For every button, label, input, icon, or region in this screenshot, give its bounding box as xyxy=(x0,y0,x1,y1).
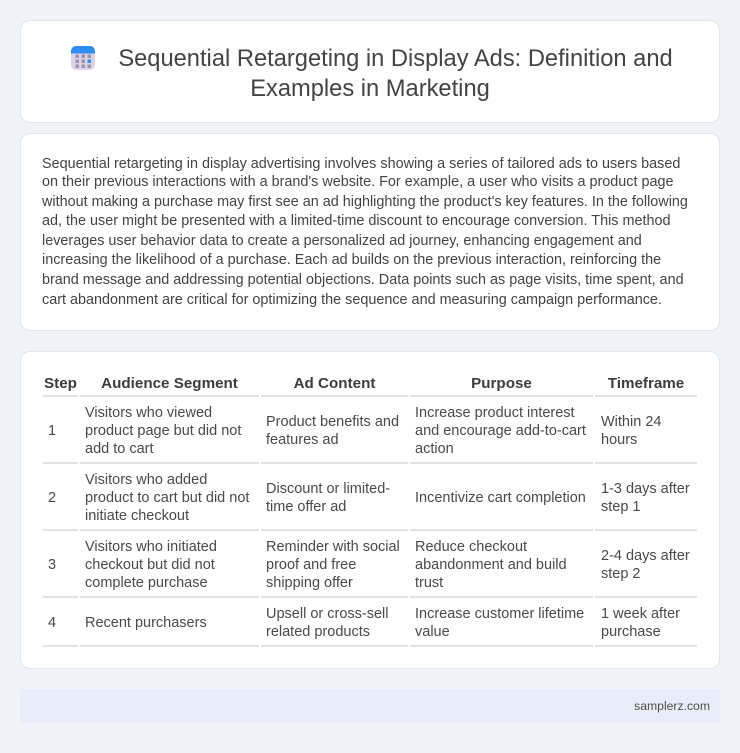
row 3: checkout but did not xyxy=(85,557,215,573)
row 1: Visitors who viewed xyxy=(85,405,212,421)
row 1: and encourage add-to-cart xyxy=(415,423,586,439)
row 3: step 2 xyxy=(601,566,640,582)
row 1: add to cart xyxy=(85,441,154,457)
row 1: Product benefits and xyxy=(266,414,399,430)
row 2: 2 xyxy=(48,490,56,506)
row 2: 1-3 days after xyxy=(601,481,690,497)
row 2: Visitors who added xyxy=(85,472,207,488)
description text: ad, the user might be presented with a limited-time discount to encourage conversion. This method xyxy=(42,213,670,229)
footer xyxy=(20,689,720,723)
title panel xyxy=(20,20,720,123)
row 1 xyxy=(48,405,661,457)
description text: leverages user behavior data to create a personalized ad journey, enhancing engagement and xyxy=(42,233,642,249)
row 3: Visitors who initiated xyxy=(85,539,217,555)
row 2: product to cart but did not xyxy=(85,490,249,506)
description text xyxy=(42,156,688,308)
row 4: Upsell or cross-sell xyxy=(266,606,388,622)
table header: Purpose xyxy=(471,375,532,392)
row 3: shipping offer xyxy=(266,575,353,591)
row 4: Recent purchasers xyxy=(85,615,207,631)
table header: Audience Segment xyxy=(101,375,238,392)
row 3: complete purchase xyxy=(85,575,208,591)
description text: on their previous interactions with a brand's website. For example, a user who visits a product page xyxy=(42,174,673,190)
description text: without making a purchase may first see an ad highlighting the product's key features. In the following xyxy=(42,194,688,210)
table header: Timeframe xyxy=(608,375,684,392)
panel: table xyxy=(20,351,720,669)
row 4: related products xyxy=(266,624,370,640)
row 1: 1 xyxy=(48,423,56,439)
title: Sequential Retargeting in Display Ads: Definition and xyxy=(118,46,673,72)
description text: brand message and addressing potential objections. Data points such as page visits, time spent, and xyxy=(42,272,684,288)
row 1: product page but did not xyxy=(85,423,241,439)
row 3: proof and free xyxy=(266,557,356,573)
row 3: 2-4 days after xyxy=(601,548,690,564)
row 4: purchase xyxy=(601,624,661,640)
footer text: samplerz.com xyxy=(634,699,710,713)
row 4: Increase customer lifetime xyxy=(415,606,584,622)
row 3: trust xyxy=(415,575,443,591)
row 2: time offer ad xyxy=(266,499,346,515)
row 1: Within 24 xyxy=(601,414,661,430)
row 3: Reduce checkout xyxy=(415,539,527,555)
title xyxy=(118,46,673,102)
row 1: action xyxy=(415,441,454,457)
row 4: value xyxy=(415,624,450,640)
row 3 xyxy=(48,539,690,591)
table header xyxy=(44,375,684,392)
row 2 xyxy=(48,472,690,524)
row 4 xyxy=(48,606,680,640)
row 1: hours xyxy=(601,432,637,448)
row 4: 4 xyxy=(48,615,56,631)
row 3: abandonment and build xyxy=(415,557,567,573)
panel: description xyxy=(20,133,720,331)
row 1: features ad xyxy=(266,432,339,448)
icon: calendar xyxy=(71,46,95,70)
description text: cart abandonment are critical for optimizing the sequence and measuring campaign performance. xyxy=(42,292,662,308)
row 2: Discount or limited- xyxy=(266,481,390,497)
table header: Ad Content xyxy=(294,375,375,392)
row 2: Incentivize cart completion xyxy=(415,490,586,506)
row 3: Reminder with social xyxy=(266,539,400,555)
row 2: step 1 xyxy=(601,499,640,515)
row 3: 3 xyxy=(48,557,56,573)
row 1: Increase product interest xyxy=(415,405,575,421)
description text: Sequential retargeting in display advertising involves showing a series of tailored ads to users based xyxy=(42,156,680,172)
row 2: initiate checkout xyxy=(85,508,189,524)
table header: Step xyxy=(44,375,77,392)
title: Examples in Marketing xyxy=(250,76,490,102)
row 4: 1 week after xyxy=(601,606,680,622)
table xyxy=(43,375,697,647)
description text: increasing the likelihood of a purchase. Each ad builds on the previous interaction, reinforcing the xyxy=(42,252,661,268)
